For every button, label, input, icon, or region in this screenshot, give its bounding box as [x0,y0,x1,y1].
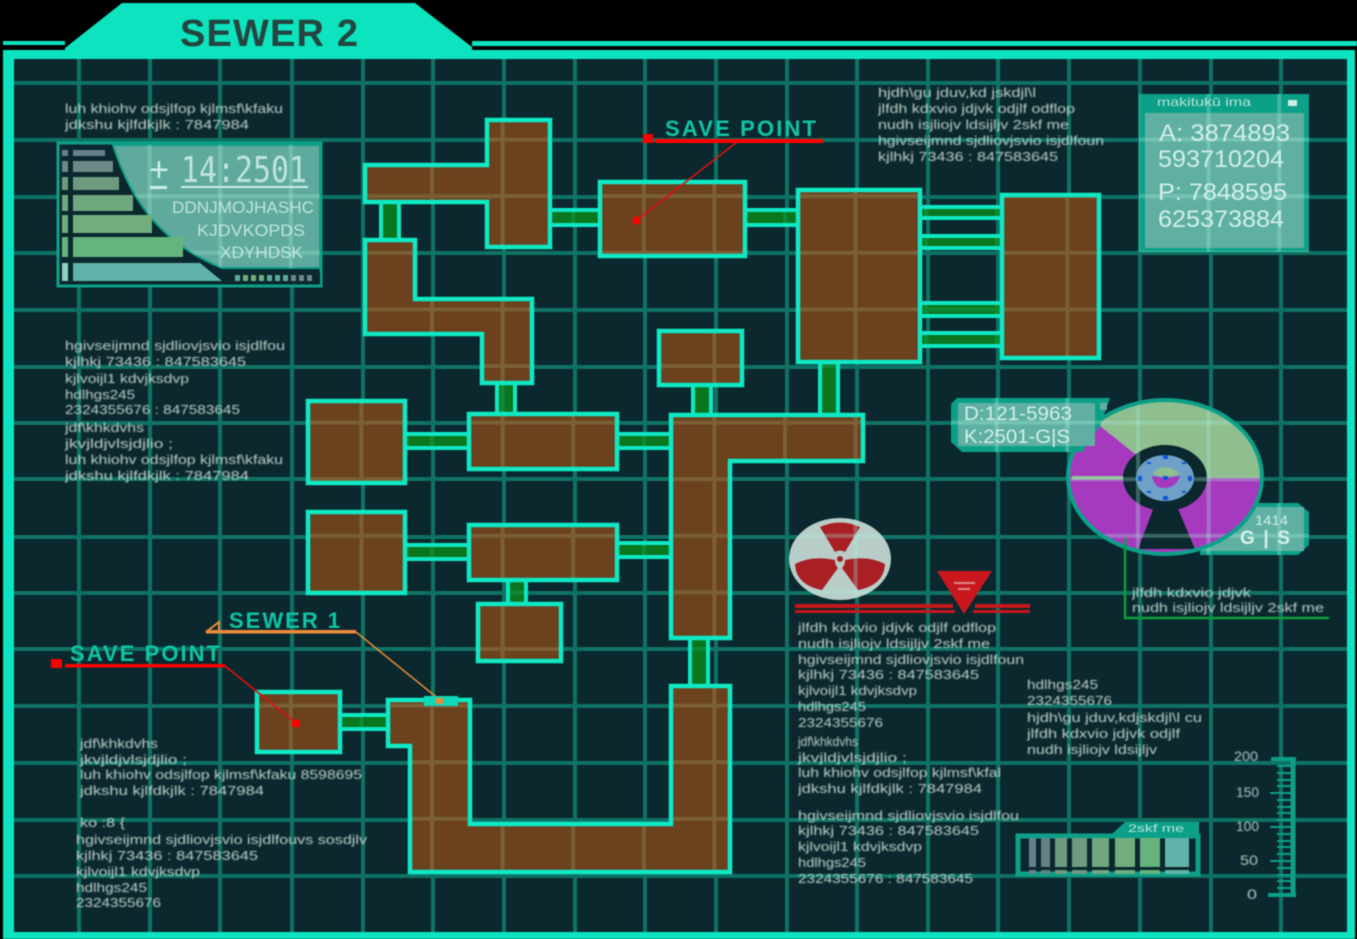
text: bottom left note: ko :8 { [80,815,126,830]
text: disk note [1131,585,1324,615]
text: right note: hjdh\gu jduv,kdjskdjl\l cu [1027,710,1202,725]
text: top right note: hjdh\gu jduv,kd jskdjl\l [878,85,1036,100]
text: bottom left note [76,736,368,910]
icon: radiation hazard [789,518,891,600]
text: right note [1026,677,1202,757]
text: centre note: hgivseijmnd sjdliovjsvio isjdlfou [798,808,1019,823]
bar gauge: 2skf me [1128,823,1184,835]
text: centre note: jdkshu kjlfdkjlk : 7847984 [797,781,982,796]
callout: sewer 1: SEWER 1 [229,608,340,633]
scale labels [1234,748,1259,902]
disk label: G|S: G | S [1240,528,1290,549]
text: bottom left note: 2324355676 [76,895,161,910]
callout: sewer 1 [206,608,458,706]
text: top right note: jlfdh kdxvio jdjvk odjlf odflop [877,101,1075,116]
text: top right note: hgivseijmnd sjdliovjsvio isjdlfoun [878,133,1104,148]
clock labels: DDNJMOJHASHC [172,198,314,217]
text: left middle note: luh khiohv odsjlfop kjlmsf\kfaku [65,452,283,467]
coordinate numbers: 625373884 [1158,206,1284,233]
scale labels: 100 [1236,818,1259,834]
text: top right note: nudh isjliojv ldsijljv 2skf me [878,117,1069,132]
text: top left note [64,101,283,132]
text: top left note: jdkshu kjlfdkjlk : 7847984 [64,117,249,132]
time readout: + [149,151,169,189]
disk label: D/K: K:2501-G|S [964,427,1070,448]
text: left middle note: hdlhgs245 [65,387,135,402]
clock labels [172,198,314,262]
text: right note: nudh isjliojv ldsijljv [1027,742,1158,757]
text: disk note: nudh isjliojv ldsijljv 2skf me [1132,600,1324,615]
dial centre [1152,467,1180,478]
icon: warning triangle and bars [795,571,1030,614]
text: centre note: luh khiohv odsjlfop kjlmsf\kfal [798,765,1001,780]
disk label: G|S [1200,503,1309,555]
text: left middle note: kjlhkj 73436 : 847583645 [65,354,246,369]
text: centre note: jkvjldjvlsjdjlio ; [797,750,907,765]
bar gauge [1018,822,1199,874]
map rooms [257,120,1099,872]
panel: coordinates [1139,94,1309,252]
text: right note: jlfdh kdxvio jdjvk odjlf [1026,726,1180,741]
text: centre note: hdlhgs245 [798,855,866,870]
text: centre note: jdf\khkdvhs [797,734,858,749]
title: SEWER 2 [180,13,358,55]
scale labels: 0 [1247,886,1257,902]
map connectors [340,202,1002,729]
coordinate numbers: A: 3874893 [1159,120,1290,147]
leader line: disk [1125,538,1329,618]
coordinate numbers: 593710204 [1158,146,1284,173]
text: left middle note: kjlvoijl1 kdvjksdvp [65,371,189,386]
scale labels: 50 [1240,852,1258,868]
clock labels: XDYHDSK [220,243,304,262]
text: bottom left note: kjlvoijl1 kdvjksdvp [76,864,200,879]
text: centre note: hgivseijmnd sjdliovjsvio isjdlfoun [798,652,1024,667]
coordinate numbers [1158,120,1290,233]
disk label: D/K [951,398,1110,452]
text: right note: hdlhgs245 [1027,677,1098,692]
text: centre note: nudh isjliojv ldsijljv 2skf me [798,636,990,651]
text: bottom left note: luh khiohv odsjlfop kjlmsf\kfaku 8598695 [80,767,362,782]
text: centre note: kjlvoijl1 kdvjksdvp [798,839,922,854]
text: right note: 2324355676 [1027,693,1112,708]
lower wedge [1138,478,1195,549]
text: bottom left note: kjlhkj 73436 : 847583645 [76,848,258,863]
text: top right note: kjlhkj 73436 : 847583645 [878,149,1058,164]
text: left middle note: hgivseijmnd sjdliovjsvio isjdlfou [65,338,285,353]
text: bottom left note: jdf\khkdvhs [79,736,159,751]
green sector [1100,401,1261,478]
clock labels: KJDVKOPDS [197,221,305,240]
callout: save point bottom: SAVE POINT [70,641,221,666]
scale labels: 200 [1234,748,1258,764]
callout: save point bottom [51,641,300,727]
progress dots [228,272,320,284]
callout: save point top: SAVE POINT [665,116,817,141]
coordinate numbers: P: 7848595 [1158,179,1287,206]
text: top right note [877,85,1104,164]
text: centre note: 2324355676 : 847583645 [798,871,973,886]
scale labels: 150 [1236,784,1259,800]
text: left middle note [64,338,285,483]
text: left middle note: jdkshu kjlfdkjlk : 7847984 [64,468,249,483]
time readout: 14:2501 [181,150,307,191]
text: centre note: 2324355676 [798,715,883,730]
text: centre note: kjlvoijl1 kdvjksdvp [798,683,917,698]
dial ticks [1138,455,1192,500]
text: centre note: kjlhkj 73436 : 847583645 [798,823,979,838]
disk label: G|S: 1414 [1255,512,1288,528]
text: disk note: jlfdh kdxvio jdjvk [1131,585,1252,600]
time readout [149,150,308,191]
disk label: D/K: D:121-5963 [964,404,1072,425]
text: bottom left note: jkvjldjvlsjdjlio ; [79,752,187,767]
text: centre note: kjlhkj 73436 : 847583645 [798,667,979,682]
text: bottom left note: hdlhgs245 [76,880,147,895]
panel: clock [58,143,321,286]
title tab [65,3,472,59]
text: left middle note: jdf\khkdvhs [64,420,145,435]
text: bottom left note: hgivseijmnd sjdliovjsvio isjdlfouvs sosdjlv [76,832,368,847]
text: left middle note: jkvjldjvlsjdjlio ; [64,436,173,451]
stepped bars [62,150,222,281]
text: left middle note: 2324355676 : 847583645 [65,402,240,417]
panel: coordinates: makitukū ima [1157,95,1251,109]
disk diagram [1068,395,1270,554]
callout: save point top [633,116,823,224]
text: centre note [797,620,1024,886]
text: centre note: jlfdh kdxvio jdjvk odjlf odflop [797,620,996,635]
scale ruler [1234,748,1296,902]
text: top left note: luh khiohv odsjlfop kjlmsf\kfaku [65,101,283,116]
text: centre note: hdlhgs245 [798,699,866,714]
gauge bars [1029,838,1189,874]
text: bottom left note: jdkshu kjlfdkjlk : 7847984 [79,783,264,798]
